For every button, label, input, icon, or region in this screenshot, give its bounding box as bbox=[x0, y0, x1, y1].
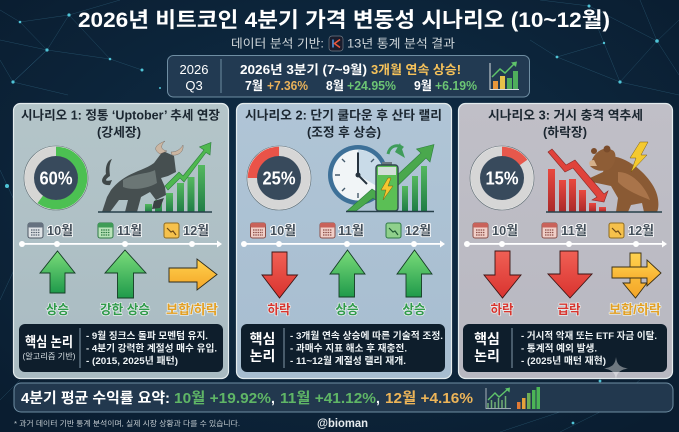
icon: calendar November bbox=[98, 223, 113, 238]
logic box 3: 논리 bbox=[474, 348, 500, 364]
logic box 1: - 9월 징크스 돌파 모멘텀 유지. bbox=[86, 330, 208, 342]
panel: scenario 2 bbox=[236, 104, 452, 378]
icon: calendar December bbox=[609, 223, 624, 238]
panel: scenario 1 bbox=[14, 104, 228, 378]
icon: data source logo bbox=[329, 36, 343, 51]
label: 보합/하락: 보합/하락 bbox=[166, 302, 218, 317]
scenario 2 heading: 시나리오 2: 단기 쿨다운 후 산타 랠리 bbox=[245, 108, 442, 122]
illustration: bear and falling bars bbox=[546, 142, 662, 212]
logic box 1: - 4분기 강력한 계절성 매수 유입. bbox=[86, 342, 217, 354]
panel: Q3 recap: 9월 bbox=[414, 78, 432, 93]
panel: Q3 recap: 2026년 3분기 (7~9월) bbox=[240, 62, 367, 77]
logic box 2: - 3개월 연속 상승에 따른 기술적 조정. bbox=[290, 330, 443, 342]
logic box 2 bbox=[241, 324, 445, 372]
label: 하락: 하락 bbox=[490, 302, 514, 317]
arrow: up November strong bbox=[105, 250, 146, 298]
month row with calendars: 11월 bbox=[561, 223, 587, 238]
subtitle: 13년 통계 분석 결과 bbox=[347, 36, 455, 50]
panel: Q3 recap: +6.19% bbox=[435, 79, 477, 93]
icon: calendar October bbox=[250, 223, 266, 238]
timeline bbox=[241, 240, 445, 248]
month row with calendars bbox=[473, 223, 654, 238]
arrow: down October bbox=[484, 251, 521, 298]
watermark sparkle bbox=[604, 357, 628, 380]
scenario 2 heading: (조정 후 상승) bbox=[307, 124, 381, 140]
donut chart: 60%: 60% bbox=[40, 168, 72, 188]
icon: calendar December bbox=[164, 223, 179, 238]
month row with calendars: 12월 bbox=[405, 223, 431, 238]
month row with calendars: 10월 bbox=[492, 223, 518, 238]
arrow: down November steep bbox=[548, 251, 592, 298]
illustration: clock, battery and rising arrow bbox=[328, 143, 434, 212]
label: 강한 상승: 강한 상승 bbox=[100, 302, 150, 317]
summary bar: 11월 +41.12% bbox=[280, 390, 376, 407]
summary bar bbox=[14, 383, 673, 412]
logic box 2: - 11~12월 계절성 랠리 재개. bbox=[290, 355, 406, 367]
credit: @bioman bbox=[317, 416, 368, 430]
arrow: sideways and down December bbox=[612, 253, 661, 298]
illustration: bull and rising bars bbox=[98, 141, 212, 212]
panel: Q3 recap: +24.95% bbox=[347, 79, 396, 93]
scenario 1 heading bbox=[21, 108, 220, 140]
logic box 1: - (2015, 2025년 패턴) bbox=[86, 355, 178, 367]
arrow: up October bbox=[40, 251, 75, 293]
panel: Q3 recap: 7월 bbox=[245, 78, 263, 93]
label: 상승: 상승 bbox=[336, 302, 359, 317]
logic box 3: - 통계적 예외 발생. bbox=[521, 342, 597, 354]
panel: Q3 recap bbox=[168, 56, 530, 97]
logic box 2: - 과매수 지표 해소 후 재충전. bbox=[290, 342, 407, 354]
logic box 1: 핵심 논리 bbox=[25, 334, 73, 350]
panel: Q3 recap: Q3 bbox=[185, 78, 203, 93]
arrow: up December bbox=[397, 250, 432, 297]
summary bar: 10월 +19.92% bbox=[174, 390, 271, 407]
month row with calendars: 11월 bbox=[338, 223, 364, 238]
icon: calendar October bbox=[473, 223, 488, 238]
icon: calendar October bbox=[28, 223, 43, 238]
month row with calendars: 10월 bbox=[47, 223, 73, 238]
label: 상승: 상승 bbox=[46, 302, 69, 317]
month row with calendars: 12월 bbox=[628, 223, 654, 238]
scenario 2 heading bbox=[245, 108, 442, 140]
donut chart: 15%: 15% bbox=[486, 168, 518, 188]
logic box 3: - 거시적 악재 또는 ETF 자금 이탈. bbox=[521, 330, 657, 342]
arrow: down October bbox=[262, 252, 298, 298]
panel: Q3 recap: 3개월 연속 상승! bbox=[371, 62, 461, 77]
panel: Q3 recap: +7.36% bbox=[267, 79, 308, 93]
logic box 1 bbox=[19, 324, 223, 372]
icon: rising bar chart bbox=[490, 62, 519, 90]
logic box 3: - (2025년 매턴 재현) bbox=[521, 355, 606, 367]
summary bar: , bbox=[271, 390, 275, 406]
panel: scenario 3 bbox=[458, 104, 672, 378]
label: 상승: 상승 bbox=[402, 302, 426, 317]
logic box 2: 논리 bbox=[250, 348, 275, 364]
donut chart: 60% bbox=[24, 146, 88, 210]
arrow: up November bbox=[330, 250, 365, 297]
panel: Q3 recap: 2026 bbox=[180, 62, 208, 77]
icon: calendar December bbox=[386, 223, 401, 238]
footnote: * 과거 데이터 기반 통계 분석이며, 실제 시장 상황과 다를 수 있습니다. bbox=[14, 419, 240, 428]
summary bar: 4분기 평균 수익률 요약: bbox=[21, 390, 170, 407]
logic box 3 bbox=[463, 324, 667, 372]
scenario 3 heading bbox=[488, 108, 643, 140]
icon: line and bars chart bbox=[486, 388, 511, 408]
title: 2026년 비트코인 4분기 가격 변동성 시나리오 (10~12월) bbox=[78, 9, 610, 32]
icon: calendar November bbox=[542, 223, 557, 238]
subtitle: 데이터 분석 기반: bbox=[231, 36, 324, 50]
logic box 3: 핵심 bbox=[474, 331, 500, 347]
month row with calendars bbox=[250, 223, 431, 238]
donut chart: 15% bbox=[470, 146, 534, 210]
scenario 3 heading: 시나리오 3: 거시 충격 역추세 bbox=[488, 108, 643, 122]
logic box 2: 핵심 bbox=[250, 331, 275, 347]
scenario 1 heading: 시나리오 1: 정통 ‘Uptober’ 추세 연장 bbox=[21, 108, 220, 122]
month row with calendars bbox=[28, 223, 209, 238]
month row with calendars: 11월 bbox=[117, 223, 142, 238]
summary bar: 12월 +4.16% bbox=[385, 390, 473, 407]
arrow: right December bbox=[169, 259, 217, 290]
donut chart: 25%: 25% bbox=[262, 168, 296, 188]
label: 급락: 급락 bbox=[558, 302, 581, 317]
subtitle bbox=[231, 36, 455, 51]
icon: signal bars bbox=[517, 387, 540, 409]
icon: calendar November bbox=[320, 223, 335, 238]
timeline bbox=[19, 240, 222, 248]
month row with calendars: 12월 bbox=[183, 223, 209, 238]
timeline bbox=[464, 240, 667, 248]
month row with calendars: 10월 bbox=[270, 223, 296, 238]
donut chart: 25% bbox=[247, 146, 311, 210]
summary bar: , bbox=[376, 390, 380, 406]
panel: Q3 recap: 8월 bbox=[326, 78, 344, 93]
scenario 3 heading: (하락장) bbox=[543, 126, 587, 140]
scenario 1 heading: (강세장) bbox=[97, 126, 141, 140]
logic box 1: (알고리즘 기반) bbox=[22, 351, 76, 361]
label: 보합/하락: 보합/하락 bbox=[609, 302, 661, 317]
label: 하락: 하락 bbox=[268, 302, 291, 317]
